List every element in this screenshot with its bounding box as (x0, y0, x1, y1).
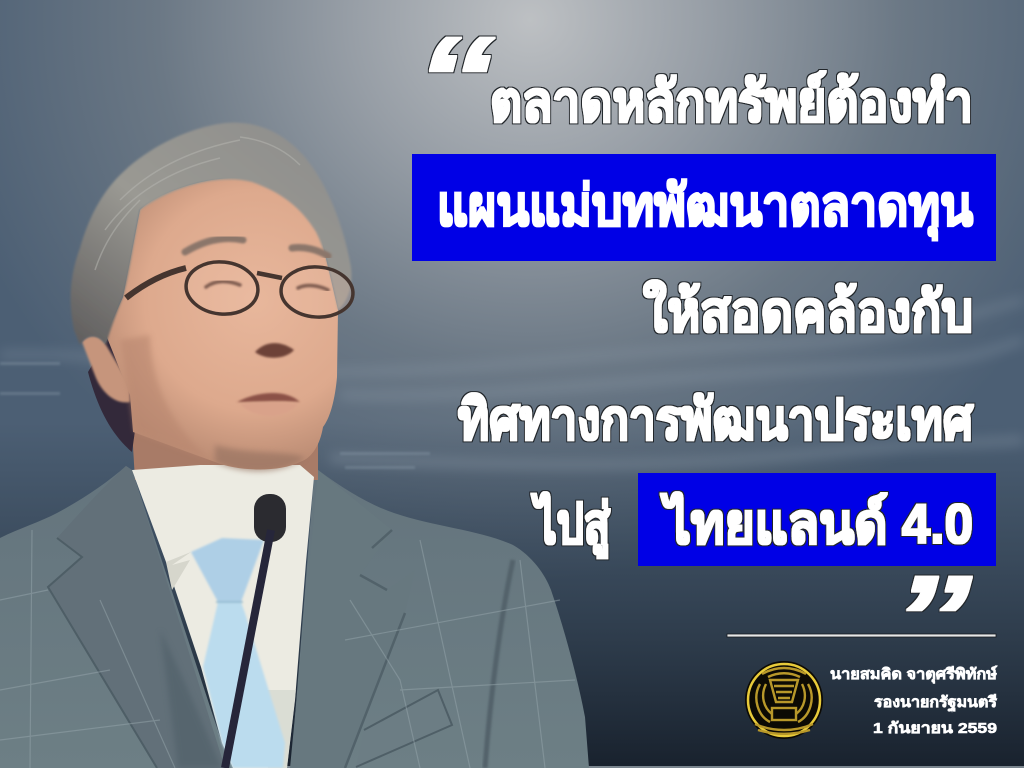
hair back shadow (88, 335, 140, 452)
face (106, 178, 338, 470)
signature: name, title, date: รองนายกรัฐมนตรี (874, 694, 998, 712)
cheek and jaw shading (120, 335, 210, 460)
highlight box: master plan (412, 154, 996, 261)
microphone (225, 494, 286, 768)
opening quotation mark: “ (415, 12, 495, 146)
government seal (745, 661, 823, 739)
shirt and collar (132, 465, 314, 768)
closing quotation mark: ” (892, 551, 972, 685)
highlight box: Thailand 4.0: ไทยแลนด์ 4.0 (660, 491, 973, 555)
person: portrait photo stand-in (0, 123, 589, 768)
headline line 5 lead: ไปสู่ (531, 491, 611, 559)
ear (82, 336, 130, 402)
neck (132, 430, 318, 480)
signature: name, title, date: นายสมคิด จาตุศรีพิทักษ์ (830, 665, 997, 684)
tie (191, 538, 285, 768)
eye shadows and lids (206, 281, 328, 290)
headline line 1: ตลาดหลักทรัพย์ต้องทำ (490, 70, 973, 133)
eyebrows (185, 238, 328, 256)
hair (71, 123, 352, 345)
suit jacket (0, 466, 589, 768)
nose (255, 343, 294, 358)
highlight box: Thailand 4.0 (638, 473, 996, 566)
mouth (237, 393, 300, 416)
signature: name, title, date: 1 กันยายน 2559 (873, 720, 997, 737)
hair strands (95, 137, 300, 270)
divider (727, 634, 996, 637)
signature: name, title, date (830, 665, 998, 737)
glasses (126, 258, 355, 319)
headline line 3: ให้สอดคล้องกับ (643, 279, 973, 343)
